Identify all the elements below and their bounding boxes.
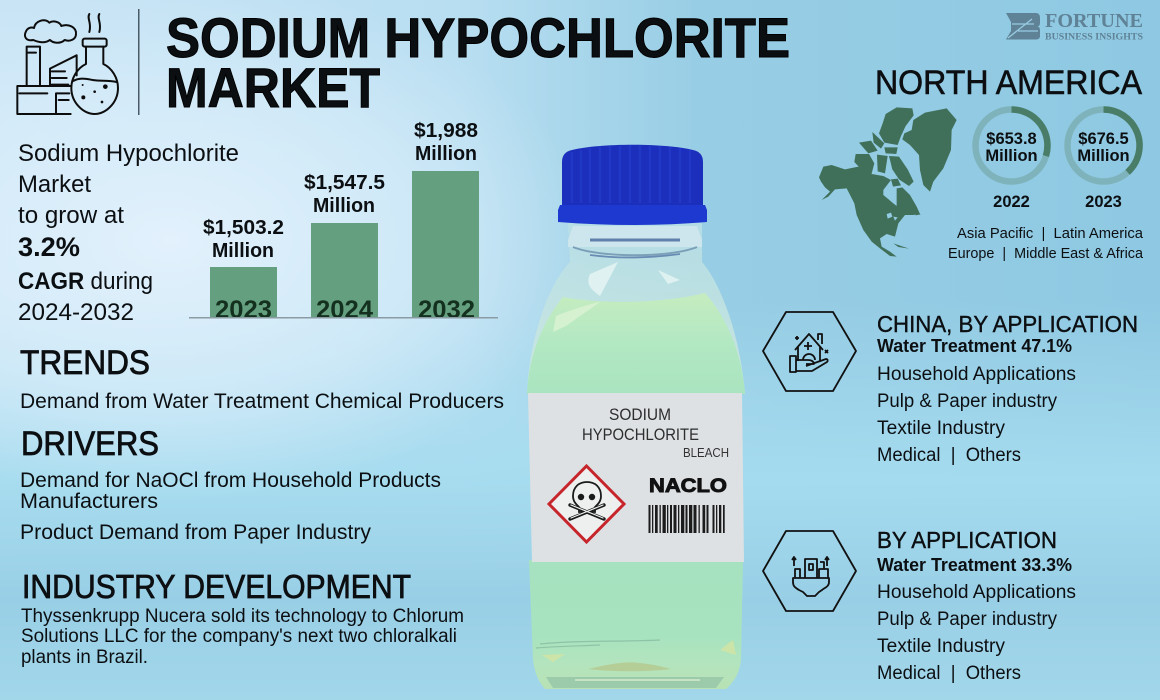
divider — [138, 9, 140, 115]
label text: SODIUM — [609, 406, 671, 424]
industry development: INDUSTRY DEVELOPMENT — [22, 568, 411, 605]
donut: 2022: 2022 — [993, 193, 1030, 211]
bar 2024: 2024 — [316, 296, 373, 324]
list: by application: Textile Industry — [877, 636, 1005, 657]
text: other regions: Europe | Middle East & Africa — [948, 245, 1144, 262]
drivers: DRIVERS — [21, 425, 159, 463]
bar 2032: 2032 — [418, 296, 475, 324]
glass silhouette — [527, 223, 745, 394]
cap — [562, 145, 703, 205]
list: china by application: Medical | Others — [877, 445, 1021, 466]
trends — [20, 344, 504, 413]
bar 2023: Million — [212, 240, 274, 262]
industry development: Solutions LLC for the company's next two chloralkali — [21, 626, 457, 647]
icon: factory and flask — [17, 14, 118, 114]
trends: TRENDS — [20, 344, 150, 382]
list: by application — [877, 527, 1076, 684]
donut: 2022: Million — [985, 147, 1038, 165]
bar 2032: Million — [415, 143, 477, 165]
label text: NACLO — [649, 476, 727, 497]
list: china by application: CHINA, BY APPLICATION — [877, 311, 1138, 337]
barcode — [648, 505, 725, 533]
industry development — [21, 568, 464, 668]
text: CAGR summary: 3.2% — [18, 232, 80, 262]
text: other regions — [948, 225, 1144, 262]
title: MARKET — [166, 56, 380, 119]
logo: Fortune Business Insights — [1006, 10, 1143, 42]
industry development: Thyssenkrupp Nucera sold its technology to Chlorum — [21, 606, 464, 627]
map: north america — [819, 107, 957, 257]
text: CAGR summary — [18, 140, 239, 326]
donut: 2022: $653.8 — [986, 130, 1037, 148]
list: china by application: Textile Industry — [877, 418, 1005, 439]
donut: 2022 — [976, 110, 1048, 211]
list: by application: Pulp & Paper industry — [877, 609, 1057, 630]
heading: north america: NORTH AMERICA — [875, 64, 1142, 102]
text: CAGR summary: Market — [18, 171, 91, 198]
text: other regions: Asia Pacific | Latin America — [957, 225, 1144, 242]
label — [528, 393, 744, 562]
text: CAGR summary: CAGR during — [18, 268, 153, 295]
trends: Demand from Water Treatment Chemical Producers — [20, 390, 504, 413]
bar 2023 — [203, 217, 284, 324]
logo: Fortune Business Insights: BUSINESS INSIGHTS — [1045, 32, 1143, 42]
donut: 2023: Million — [1077, 147, 1130, 165]
list: china by application: Water Treatment 47.1% — [877, 336, 1072, 356]
bar chart: market size — [189, 120, 498, 324]
bar 2024: Million — [313, 195, 375, 217]
donut: 2023 — [1068, 109, 1140, 211]
list: by application: Water Treatment 33.3% — [877, 555, 1072, 575]
title: SODIUM HYPOCHLORITE — [166, 6, 790, 69]
donut: 2023: $676.5 — [1078, 130, 1129, 148]
label text: HYPOCHLORITE — [582, 426, 699, 444]
text: CAGR summary: to grow at — [18, 202, 124, 229]
donut: 2023: 2023 — [1085, 193, 1122, 211]
logo: Fortune Business Insights: FORTUNE — [1045, 10, 1143, 32]
bar 2032 — [412, 120, 479, 324]
drivers: Product Demand from Paper Industry — [20, 521, 371, 544]
list: china by application: Pulp & Paper industry — [877, 391, 1057, 412]
drivers: Manufacturers — [20, 490, 158, 513]
bar 2032: $1,988 — [414, 120, 478, 142]
label text — [582, 406, 729, 497]
bar 2023: 2023 — [215, 296, 272, 324]
list: by application: BY APPLICATION — [877, 527, 1057, 553]
bar 2023: $1,503.2 — [203, 217, 284, 239]
list: china by application: Household Applications — [877, 364, 1076, 385]
bar 2024 — [304, 172, 385, 324]
bottle — [527, 145, 745, 689]
icon: hexagon industry — [763, 531, 856, 611]
drivers — [20, 425, 441, 544]
list: by application: Medical | Others — [877, 663, 1021, 684]
label text: BLEACH — [683, 446, 729, 460]
list: china by application — [877, 311, 1138, 466]
icon: hexagon household — [763, 312, 856, 391]
liquid below label — [529, 560, 743, 689]
text: CAGR summary: Sodium Hypochlorite — [18, 140, 239, 167]
icon: hazard diamond — [549, 466, 624, 542]
text: CAGR summary: 2024-2032 — [18, 299, 134, 326]
title — [166, 6, 790, 119]
drivers: Demand for NaOCl from Household Products — [20, 469, 441, 492]
industry development: plants in Brazil. — [21, 647, 148, 668]
neck detail — [568, 226, 702, 296]
bar 2024: $1,547.5 — [304, 172, 385, 194]
liquid above label — [527, 293, 745, 394]
list: by application: Household Applications — [877, 582, 1076, 603]
